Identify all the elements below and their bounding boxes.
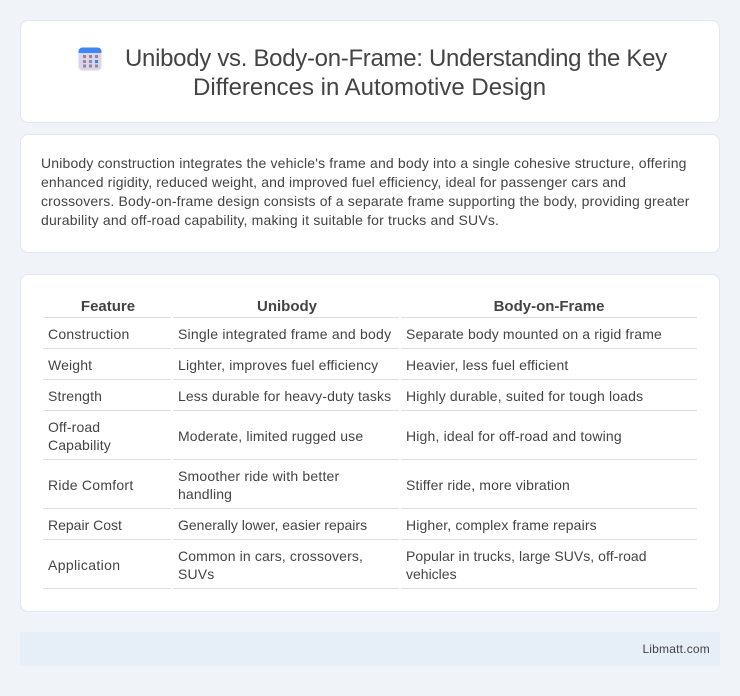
intro text: crossovers. Body-on-frame design consists of a separate frame supporting the body, providing greater <box>41 193 690 209</box>
row: strength <box>48 388 643 404</box>
row: ride comfort <box>48 468 570 502</box>
row: off-road capability: Moderate, limited rugged use <box>178 428 363 444</box>
row: application: vehicles <box>406 566 457 582</box>
row: ride comfort: Stiffer ride, more vibration <box>406 477 570 493</box>
row: construction: Construction <box>48 326 130 342</box>
title: Unibody vs. Body-on-Frame: Understanding the Key <box>125 45 667 72</box>
row: ride comfort: Smoother ride with better <box>178 468 339 484</box>
row: off-road capability: High, ideal for off-road and towing <box>406 428 622 444</box>
table header: Body-on-Frame <box>494 298 604 315</box>
row: repair cost: Repair Cost <box>48 517 122 533</box>
intro text: enhanced rigidity, reduced weight, and improved fuel efficiency, ideal for passenger cars and <box>41 174 626 190</box>
table header <box>81 298 604 315</box>
row: application: Popular in trucks, large SUVs, off-road <box>406 548 647 564</box>
row: construction <box>48 326 662 342</box>
row: application: Application <box>48 557 120 573</box>
footer bar <box>20 632 720 666</box>
row: construction: Single integrated frame and body <box>178 326 391 342</box>
panel: comparison table <box>20 274 720 612</box>
panel: intro <box>20 134 720 253</box>
row: application: SUVs <box>178 566 214 582</box>
intro text <box>41 155 690 228</box>
table header: Unibody <box>257 298 317 315</box>
row: weight: Heavier, less fuel efficient <box>406 357 568 373</box>
intro text: durability and off-road capability, making it suitable for trucks and SUVs. <box>41 212 499 228</box>
row: strength: Less durable for heavy-duty tasks <box>178 388 391 404</box>
row: off-road capability: Off-road <box>48 419 100 435</box>
row: ride comfort: handling <box>178 486 232 502</box>
row: off-road capability: Capability <box>48 437 111 453</box>
row: application <box>48 548 647 582</box>
title <box>125 45 667 101</box>
row: repair cost: Generally lower, easier repairs <box>178 517 367 533</box>
row: application: Common in cars, crossovers, <box>178 548 363 564</box>
row: repair cost: Higher, complex frame repairs <box>406 517 597 533</box>
row: repair cost <box>48 517 597 533</box>
row: weight <box>48 357 568 373</box>
row: strength: Highly durable, suited for tough loads <box>406 388 643 404</box>
intro text: Unibody construction integrates the vehicle's frame and body into a single cohesive structure, offering <box>41 155 687 171</box>
row: ride comfort: Ride Comfort <box>48 477 133 493</box>
footer text: Libmatt.com <box>642 642 710 656</box>
row: weight: Lighter, improves fuel efficiency <box>178 357 378 373</box>
row: construction: Separate body mounted on a rigid frame <box>406 326 662 342</box>
panel: header <box>20 20 720 123</box>
row: off-road capability <box>48 419 622 453</box>
title: Differences in Automotive Design <box>193 74 546 101</box>
icon: calendar <box>78 48 102 70</box>
table header: Feature <box>81 298 135 315</box>
row: weight: Weight <box>48 357 92 373</box>
row: strength: Strength <box>48 388 102 404</box>
